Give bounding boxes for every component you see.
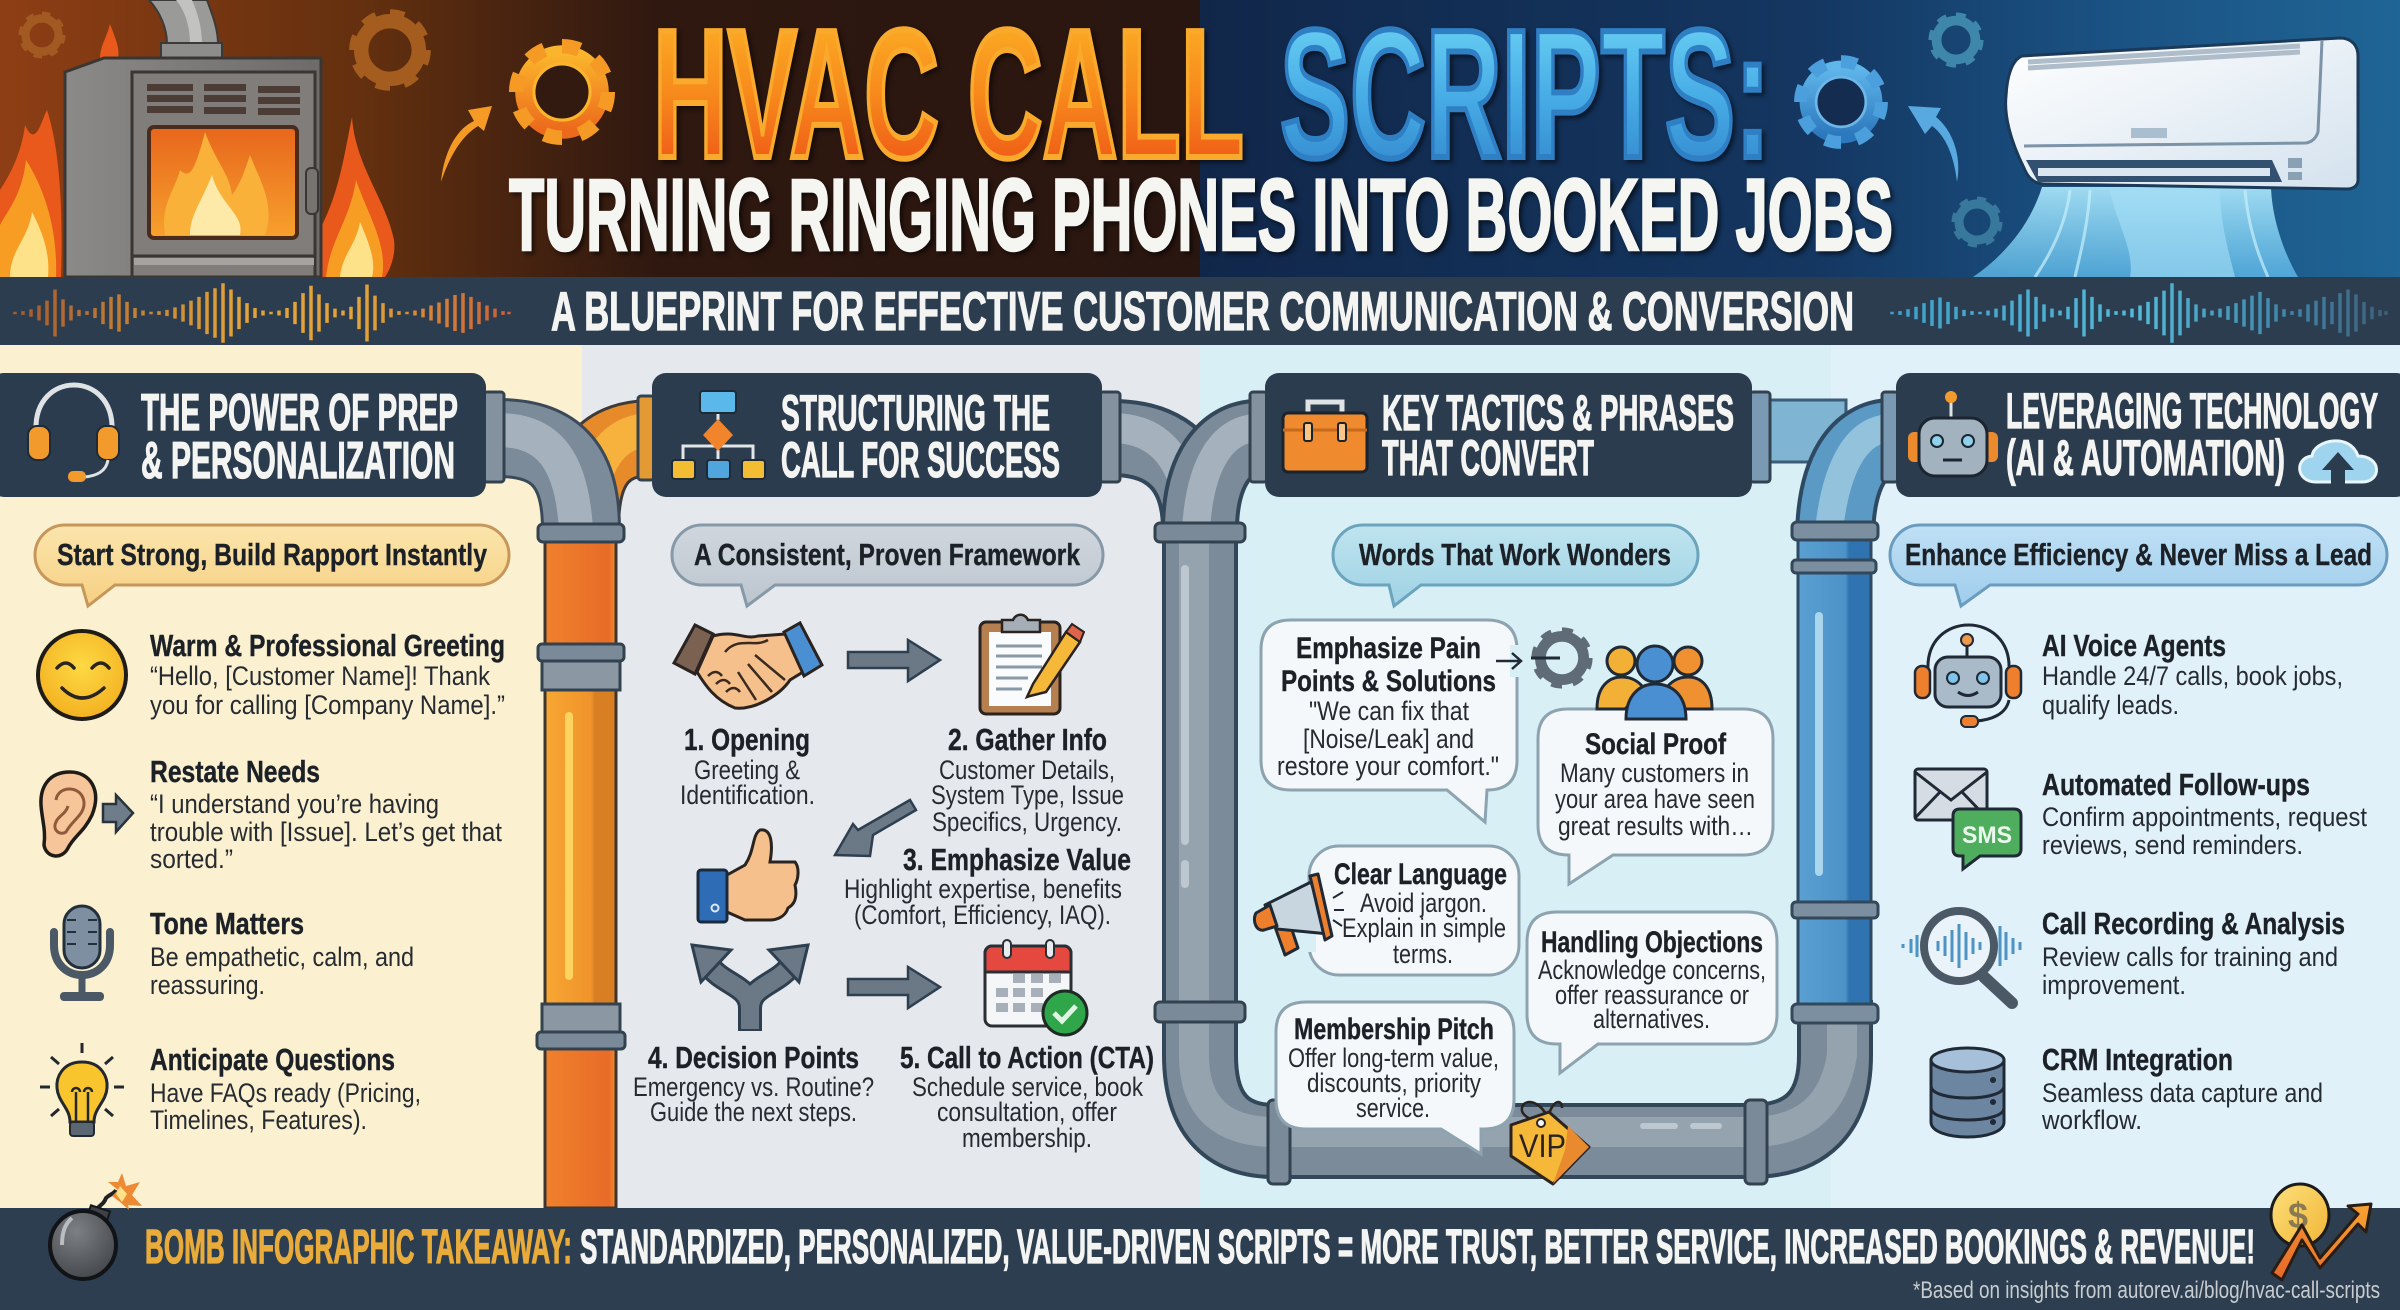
speech bubble: membership pitch: discounts, priority <box>1307 1068 1481 1098</box>
text: AI voice agents: AI Voice Agents <box>2042 628 2226 663</box>
speech bubble: membership pitch: Membership Pitch <box>1294 1013 1494 1046</box>
icon: magnifier with sound wave <box>1903 911 2020 1003</box>
speech bubble: clear language: terms. <box>1393 939 1453 969</box>
heading text <box>141 384 458 490</box>
panel background: structure <box>582 345 1200 1208</box>
heading text <box>1382 385 1734 486</box>
takeaway text <box>145 1221 2255 1274</box>
callout: framework: A Consistent, Proven Framework <box>694 537 1081 572</box>
text: restate needs: sorted.” <box>150 844 233 874</box>
heading text: KEY TACTICS & PHRASES <box>1382 385 1734 441</box>
pipe: blue riser <box>1798 540 1871 1010</box>
text: gather info: Specifics, Urgency. <box>932 807 1122 837</box>
text: opening: 1. Opening <box>684 722 810 757</box>
callout: words that work wonders <box>1333 525 1698 606</box>
speech bubble: clear language: Explain in simple <box>1342 913 1506 943</box>
icon: small teal gear lower <box>1955 200 1999 244</box>
icon: group of people <box>1597 646 1712 719</box>
speech bubble: handling objections: offer reassurance or <box>1555 980 1749 1010</box>
text: anticipate questions: Anticipate Questions <box>150 1042 395 1077</box>
text: opening: Identification. <box>680 780 815 810</box>
text: decision points: Guide the next steps. <box>650 1097 857 1127</box>
item: CRM integration <box>1931 1042 2323 1137</box>
text: emphasize value: (Comfort, Efficiency, IAQ). <box>854 900 1111 930</box>
takeaway label: BOMB INFOGRAPHIC TAKEAWAY: <box>145 1221 572 1274</box>
icon: furnace vents <box>147 84 300 115</box>
speech bubble: social proof: Many customers in <box>1560 758 1749 788</box>
text: decision points: Emergency vs. Routine? <box>633 1072 874 1102</box>
text: anticipate questions: Have FAQs ready (Pricing, <box>150 1078 421 1108</box>
pipe: grey elbow from tactics header <box>1196 428 1258 530</box>
text: emphasize value: 3. Emphasize Value <box>903 842 1131 877</box>
speech bubble: social proof: great results with… <box>1558 811 1753 841</box>
pipe highlight: blue riser <box>1815 612 1823 876</box>
text: restate needs: trouble with [Issue]. Let’s get that <box>150 817 502 847</box>
speech bubble: emphasize pain points: Emphasize Pain <box>1296 632 1481 665</box>
text: anticipate questions: Timelines, Features). <box>150 1105 367 1135</box>
arrow: gather info to emphasize value <box>835 800 916 856</box>
icon: VIP tag: VIP <box>1519 1128 1566 1164</box>
speech bubble: membership pitch: Offer long-term value, <box>1288 1043 1499 1073</box>
icon: database <box>1931 1048 2004 1137</box>
icon: large gear top <box>355 15 425 85</box>
icon: toolbox <box>1283 402 1367 472</box>
text: restate needs <box>150 754 502 874</box>
icon: robot <box>1908 391 1998 476</box>
text: call recording <box>2042 906 2345 1000</box>
speech bubble: clear language: Avoid jargon. <box>1360 888 1487 918</box>
text: greeting: Warm & Professional Greeting <box>150 628 505 663</box>
heading text: THE POWER OF PREP <box>141 384 458 442</box>
heading text <box>781 385 1060 488</box>
text: restate needs: Restate Needs <box>150 754 320 789</box>
text: decision points: 4. Decision Points <box>648 1040 859 1075</box>
air conditioner illustration <box>1973 38 2358 277</box>
icon: right flames <box>322 117 394 277</box>
banner background: cool side <box>1200 0 2400 277</box>
arrow: blue curved arrow to gear <box>1908 106 1958 182</box>
step 1: opening <box>674 623 822 810</box>
panel background: tactics <box>1200 345 1831 1208</box>
icon: left flames <box>0 110 62 277</box>
icon: microphone <box>54 906 110 1001</box>
speech bubble: emphasize pain points: "We can fix that <box>1309 696 1469 726</box>
text: call to action: membership. <box>962 1123 1092 1153</box>
icon: furnace window with fire <box>149 127 297 238</box>
icon: furnace chimney <box>149 0 222 59</box>
icon: blue title gear <box>1801 62 1881 142</box>
speech bubble: clear language: Clear Language <box>1334 858 1507 891</box>
step 4: decision points <box>633 945 874 1127</box>
speech bubble: social proof: your area have seen <box>1555 784 1755 814</box>
icon: headset <box>28 385 119 482</box>
pipe highlights: grey riser <box>1181 565 1722 1129</box>
icon: cloud upload <box>2300 441 2377 484</box>
text: opening: Greeting & <box>694 755 800 785</box>
bottom takeaway bar <box>0 1208 2400 1310</box>
icon: forked arrows <box>692 945 808 1031</box>
panel: structuring header <box>652 373 1102 497</box>
panel background: prep <box>0 345 582 1208</box>
icon: small teal gear upper <box>1932 16 1980 64</box>
text: gather info: Customer Details, <box>939 755 1115 785</box>
icon: VIP tag <box>1511 1102 1589 1184</box>
icon: handshake <box>674 623 822 708</box>
icon: megaphone <box>1254 874 1344 955</box>
pipe: grey elbow to orange riser <box>498 430 581 530</box>
pipe: grey loop around tactics panel <box>1194 530 1842 1141</box>
heading text: CALL FOR SUCCESS <box>781 432 1060 488</box>
text: greeting: you for calling [Company Name].” <box>150 690 505 720</box>
speech bubble: handling objections <box>1527 912 1777 1073</box>
icon: ear <box>41 772 96 856</box>
text: gather info: System Type, Issue <box>931 780 1124 810</box>
text: call recording: Review calls for training and <box>2042 942 2338 972</box>
icon: furnace body <box>65 58 321 277</box>
icon: small gear top left <box>22 15 62 55</box>
item: greeting <box>38 628 505 720</box>
heading text: STRUCTURING THE <box>781 385 1050 441</box>
arrow: ear to text <box>103 795 133 832</box>
speech bubble: handling objections: alternatives. <box>1593 1004 1710 1034</box>
arrow: pain points to gear <box>1496 653 1521 669</box>
text: automated follow-ups: reviews, send reminders. <box>2042 830 2303 860</box>
icon: thumbs up <box>698 830 798 922</box>
pipe network <box>484 392 1898 1208</box>
furnace illustration with flames <box>0 0 425 277</box>
heading text: THAT CONVERT <box>1382 430 1594 486</box>
icon: clipboard and pencil <box>980 615 1084 714</box>
pipe: orange elbow <box>581 430 652 530</box>
text: CRM integration: workflow. <box>2041 1105 2142 1135</box>
pipe: blue horizontal stub <box>1768 400 1846 462</box>
item: automated follow-ups <box>1915 767 2367 869</box>
item: anticipate questions <box>40 1042 421 1136</box>
speech bubble: emphasize pain points: [Noise/Leak] and <box>1303 724 1474 754</box>
panel: technology header <box>1896 373 2400 497</box>
speech bubble: handling objections: Acknowledge concerns, <box>1538 955 1766 985</box>
icon: cool air flow <box>1973 187 2298 277</box>
left sound wave <box>15 283 509 343</box>
icon: bomb <box>50 1173 142 1279</box>
speech bubble: emphasize pain points <box>1261 620 1524 822</box>
text: restate needs: “I understand you’re having <box>150 789 439 819</box>
callout: start strong: Start Strong, Build Rapport Instantly <box>57 537 488 572</box>
text: tone matters: Tone Matters <box>150 906 304 941</box>
step 5: call to action <box>900 940 1154 1153</box>
text: call to action: 5. Call to Action (CTA) <box>900 1040 1154 1075</box>
text: greeting <box>150 628 505 720</box>
item: tone matters <box>54 906 414 1001</box>
subtitle bar <box>0 277 2400 345</box>
speech bubble: membership pitch <box>1276 1002 1514 1154</box>
text: CRM integration <box>2041 1042 2323 1135</box>
icon: smiley face <box>38 631 126 719</box>
pipe: orange riser <box>545 530 616 1208</box>
item: AI voice agents <box>1915 625 2343 727</box>
text: automated follow-ups: Automated Follow-ups <box>2042 767 2310 802</box>
item: restate needs <box>41 754 502 874</box>
text: AI voice agents <box>2042 628 2343 720</box>
panel: prep and personalization header <box>0 373 486 497</box>
step 3: emphasize value <box>698 830 1131 930</box>
text: AI voice agents: Handle 24/7 calls, book jobs, <box>2042 661 2343 691</box>
icon: orange title gear <box>516 46 608 138</box>
text: AI voice agents: qualify leads. <box>2042 690 2179 720</box>
text: gather info: 2. Gather Info <box>948 722 1107 757</box>
text: emphasize value: Highlight expertise, benefits <box>844 874 1122 904</box>
callout: start strong <box>35 525 509 606</box>
speech bubble: membership pitch: service. <box>1356 1093 1430 1123</box>
icon: envelope and SMS <box>1915 769 2021 869</box>
speech bubble: clear language <box>1300 846 1519 975</box>
pipe collars: grey loop <box>1155 523 1767 1184</box>
arrow: decision points to call to action <box>848 967 940 1008</box>
pipe: grey elbow from structure header <box>1112 428 1200 530</box>
text: tone matters: Be empathetic, calm, and <box>150 942 414 972</box>
pipe flanges at headers <box>484 392 1898 482</box>
text: call recording: improvement. <box>2042 970 2186 1000</box>
icon: flowchart <box>672 391 765 479</box>
text: emphasize value <box>844 842 1131 930</box>
pipe collars: orange riser <box>537 524 625 1049</box>
callout: enhance efficiency <box>1890 525 2387 606</box>
arrow: opening to gather info <box>848 640 940 681</box>
title <box>653 0 1770 196</box>
speech bubble: emphasize pain points: restore your comfort." <box>1277 751 1499 781</box>
icon: AC unit body <box>2006 38 2358 189</box>
speech bubble: emphasize pain points: Points & Solutions <box>1281 665 1496 698</box>
text: tone matters: reassuring. <box>150 970 265 1000</box>
text: call to action: Schedule service, book <box>912 1072 1143 1102</box>
speech bubble: social proof: Social Proof <box>1585 728 1727 761</box>
banner background: hot side <box>0 0 1200 277</box>
pipe: blue elbow from technology header <box>1828 428 1892 540</box>
text: call to action <box>900 1040 1154 1153</box>
text: call to action: consultation, offer <box>937 1097 1117 1127</box>
icon: flame behind furnace <box>100 24 119 60</box>
icon: robot with headset <box>1915 625 2021 727</box>
text: CRM integration: CRM Integration <box>2042 1042 2233 1077</box>
step 2: gather info <box>931 615 1124 837</box>
item: call recording <box>1903 906 2345 1003</box>
icon: coin and growth arrow <box>2271 1184 2371 1280</box>
callout: framework <box>672 525 1103 606</box>
arrow: orange curved arrow to gear <box>441 106 492 182</box>
text: automated follow-ups <box>2042 767 2367 860</box>
icon: solution gear <box>1531 632 1588 684</box>
text: gather info <box>931 722 1124 837</box>
icon: coin and growth arrow: $ <box>2288 1195 2308 1236</box>
pipe collars: blue riser <box>1792 522 1878 1023</box>
callout: words that work wonders: Words That Work Wonders <box>1359 537 1671 572</box>
panel: tactics header <box>1265 373 1752 497</box>
text: greeting: “Hello, [Customer Name]! Thank <box>150 661 490 691</box>
panel background: technology <box>1831 345 2400 1208</box>
icon: light bulb <box>40 1043 124 1136</box>
speech bubble: social proof <box>1538 709 1773 884</box>
right sound wave <box>1892 283 2386 343</box>
icon: calendar with check <box>985 940 1087 1035</box>
heading text: & PERSONALIZATION <box>141 432 455 490</box>
speech bubble: handling objections: Handling Objections <box>1541 926 1763 959</box>
icon: envelope and SMS: SMS <box>1962 822 2012 849</box>
pipe highlight: orange riser <box>565 712 573 980</box>
heading text <box>2006 383 2378 486</box>
text: opening <box>680 722 815 810</box>
text: tone matters <box>150 906 414 1000</box>
text: decision points <box>633 1040 874 1127</box>
text: anticipate questions <box>150 1042 421 1135</box>
text: CRM integration: Seamless data capture and <box>2042 1078 2323 1108</box>
